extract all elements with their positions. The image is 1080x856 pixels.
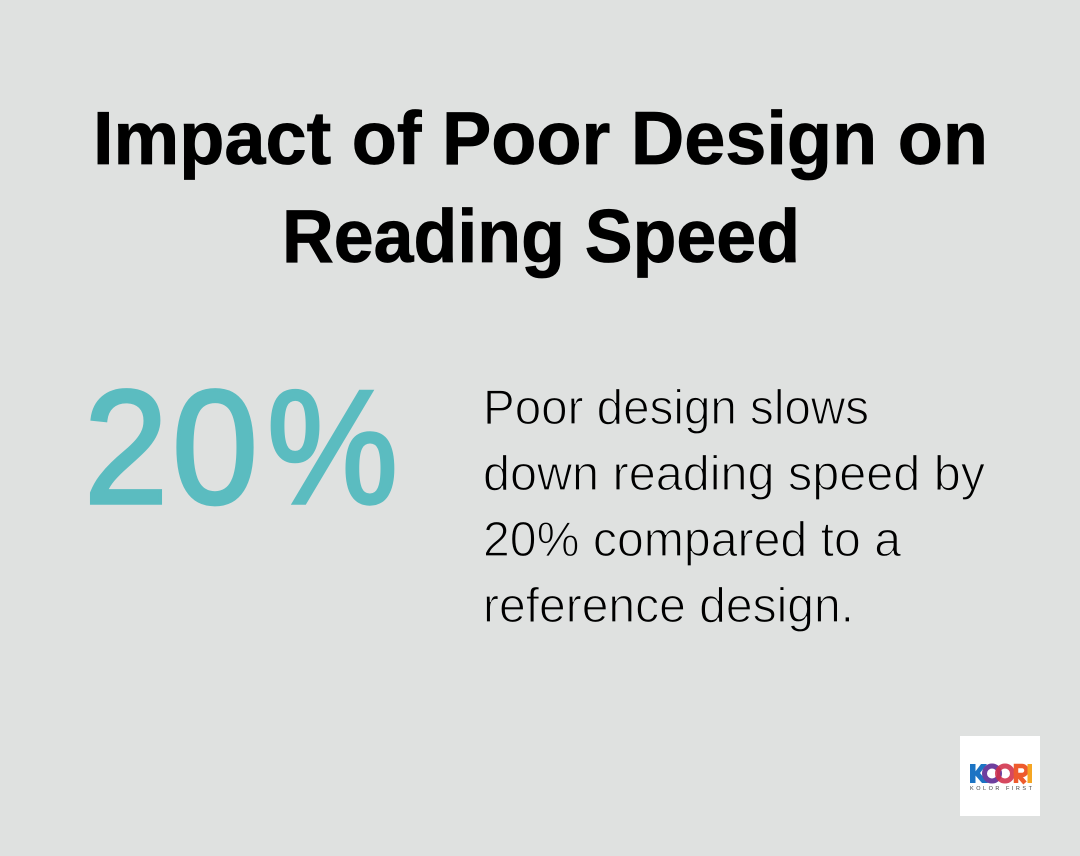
logo 1 [1028,764,1032,783]
big statistic: 20%: % [267,357,398,538]
description text [483,381,985,633]
description text: down reading speed by [483,447,985,501]
logo tagline: KOLOR FIRST [970,786,1033,792]
description text: Poor design slows [483,381,869,435]
big statistic: 20% [84,357,398,538]
logo: KOOR1 Kolor First [960,736,1040,816]
logo O letters [984,766,1000,781]
big statistic: 20%: 0 [172,357,258,538]
big statistic: 20%: 2 [84,357,168,538]
title [93,96,988,278]
description text: reference design. [483,579,854,633]
logo R [1016,766,1026,783]
title: Reading Speed [282,194,800,278]
logo K [970,764,988,783]
title: Impact of Poor Design on [93,96,988,180]
description text: 20% compared to a [483,513,902,567]
